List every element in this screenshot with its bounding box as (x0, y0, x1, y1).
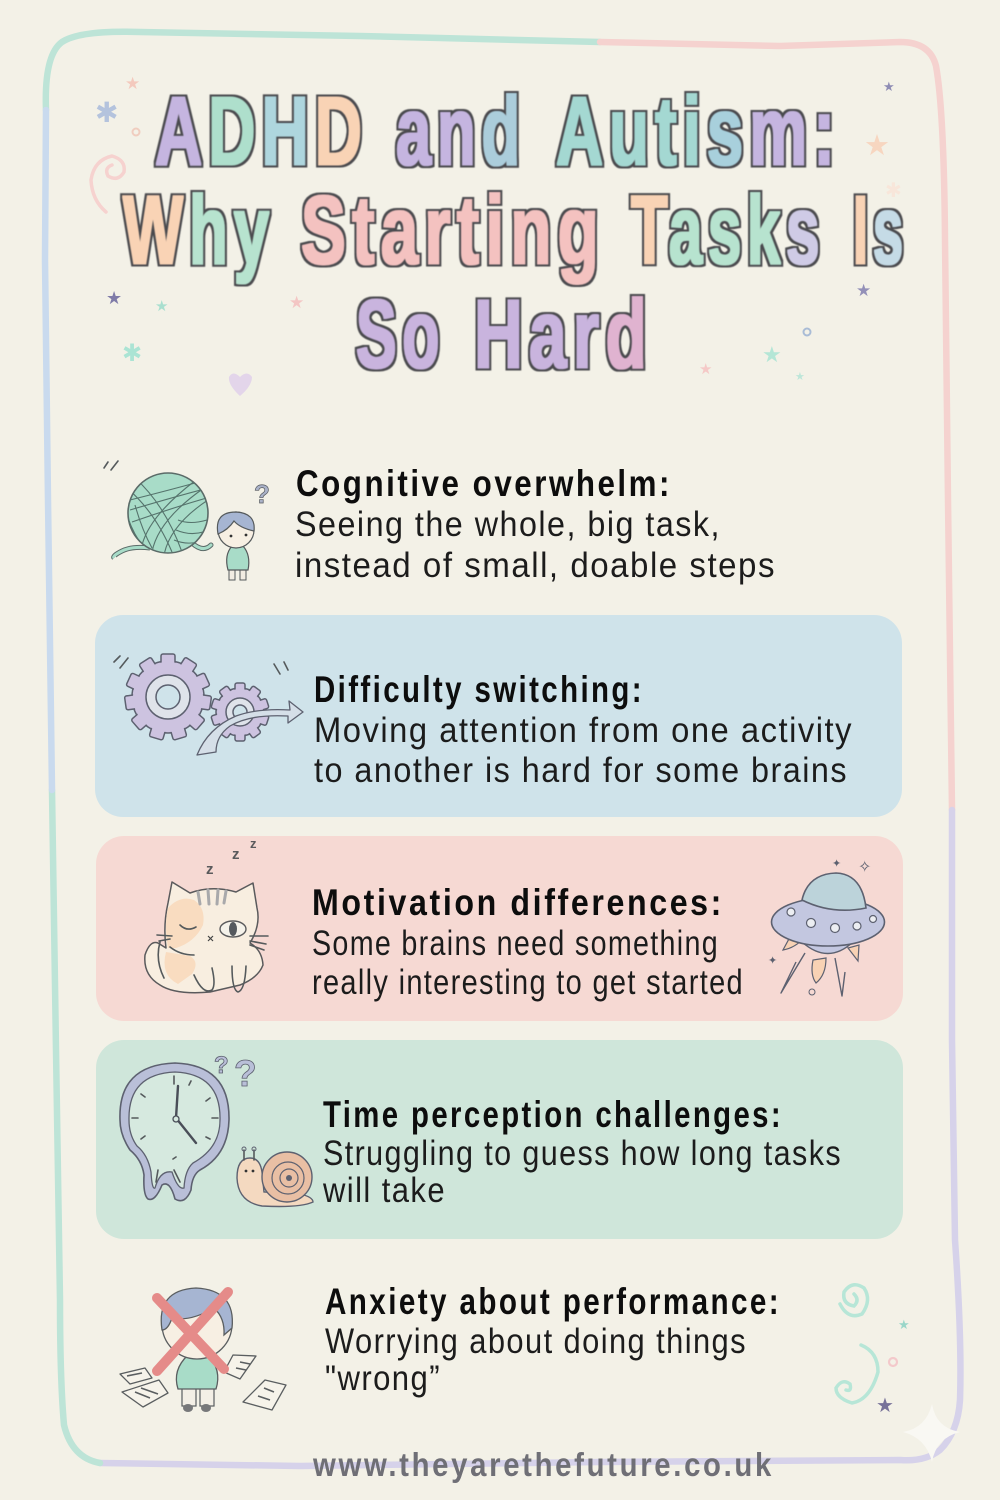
text: anxiety about performance: Anxiety about performance: (325, 1281, 781, 1322)
text: cognitive overwhelm: instead of small, doable steps (295, 546, 776, 585)
icon: melting clock (120, 1052, 257, 1201)
text: motivation differences: Motivation differences: (312, 882, 724, 923)
text: time perception challenges: Time perception challenges: (323, 1094, 783, 1135)
icon: sleep letters: z (206, 861, 214, 878)
text: motivation differences (312, 882, 744, 1002)
title line 3 (356, 280, 653, 388)
footer website address: www.theyarethefuture.co.uk (312, 1446, 774, 1483)
decorative stars and swirls around title: ★ (106, 288, 122, 309)
panel: difficulty switching (95, 615, 902, 817)
decorative stars and swirls around title: ★ (762, 343, 782, 368)
icon: sleep letters: z (232, 846, 240, 863)
text: time perception challenges: will take (322, 1171, 446, 1210)
icon: flying saucer: ✦ (832, 857, 841, 870)
icon: yarn ball and child: ? (254, 479, 270, 509)
panel: time perception challenges (96, 1040, 903, 1239)
icon: question marks (214, 1052, 257, 1094)
title line 1 (155, 76, 841, 186)
decorative stars and swirls around title: ✱ (122, 339, 142, 367)
icon: question marks: ? (234, 1053, 257, 1094)
decorative stars and swirls around title: ✱ (95, 96, 118, 129)
text: anxiety about performance: "wrong” (325, 1359, 441, 1398)
text: time perception challenges (322, 1094, 842, 1210)
title line 2: Starting (301, 176, 605, 284)
panel: motivation differences (96, 836, 903, 1021)
decorative swirls and sparkle bottom right: ★ (876, 1393, 894, 1417)
decorative stars and swirls around title: ★ (883, 80, 895, 95)
text: cognitive overwhelm: Seeing the whole, big task, (295, 505, 721, 544)
icon: flying saucer: ✦ (768, 954, 777, 967)
decorative swirls and sparkle bottom right (836, 1285, 960, 1462)
icon: sleepy cat (145, 836, 268, 993)
decorative stars and swirls around title: ★ (699, 360, 712, 378)
decorative stars and swirls around title: ✱ (885, 178, 902, 202)
icon: flying saucer (768, 857, 884, 996)
title line 1: and (396, 76, 526, 186)
decorative stars and swirls around title: ★ (125, 74, 140, 94)
title line 2 (123, 176, 908, 284)
text: difficulty switching: Difficulty switching: (314, 669, 644, 710)
icon: sleep letters: z (250, 836, 257, 851)
row 1: cognitive overwhelm (104, 461, 776, 585)
text: anxiety about performance (325, 1281, 781, 1398)
title line 2: Tasks (631, 176, 825, 284)
title line 3: So (356, 280, 445, 388)
decorative stars and swirls around title: ★ (864, 128, 890, 162)
title line 1: Autism: (556, 76, 841, 186)
text: anxiety about performance: Worrying about doing things (325, 1322, 747, 1361)
row 5: anxiety about performance (120, 1281, 781, 1412)
icon: question marks: ? (214, 1052, 229, 1079)
decorative stars and swirls around title (91, 74, 902, 396)
decorative swirls and sparkle bottom right: ★ (898, 1318, 910, 1333)
text: motivation differences: really interesting to get started (312, 963, 744, 1002)
text: difficulty switching: to another is hard for some brains (314, 751, 848, 790)
title line 3: Hard (474, 280, 653, 388)
text: difficulty switching: Moving attention from one activity (314, 711, 853, 750)
icon: sleep letters (206, 836, 257, 878)
icon: gears and arrow (114, 654, 303, 755)
decorative stars and swirls around title: ★ (155, 297, 168, 315)
icon: snail (237, 1147, 313, 1206)
icon: yarn ball and child (104, 461, 270, 580)
decorative stars and swirls around title: ★ (289, 293, 304, 313)
title (123, 76, 908, 388)
title line 2: Why (123, 176, 275, 284)
text: time perception challenges: Struggling to guess how long tasks (323, 1134, 842, 1173)
text: cognitive overwhelm (295, 463, 776, 585)
text: cognitive overwhelm: Cognitive overwhelm: (296, 463, 672, 504)
text: motivation differences: Some brains need something (312, 924, 719, 963)
child figure (217, 512, 254, 580)
icon: flying saucer: ✧ (858, 857, 871, 876)
decorative stars and swirls around title: ★ (795, 370, 805, 383)
decorative stars and swirls around title: ★ (856, 281, 871, 301)
title line 1: ADHD (155, 76, 368, 186)
icon: crossed-out worried child with papers (120, 1288, 286, 1412)
title line 2: Is (853, 176, 908, 284)
text: difficulty switching (314, 669, 853, 790)
